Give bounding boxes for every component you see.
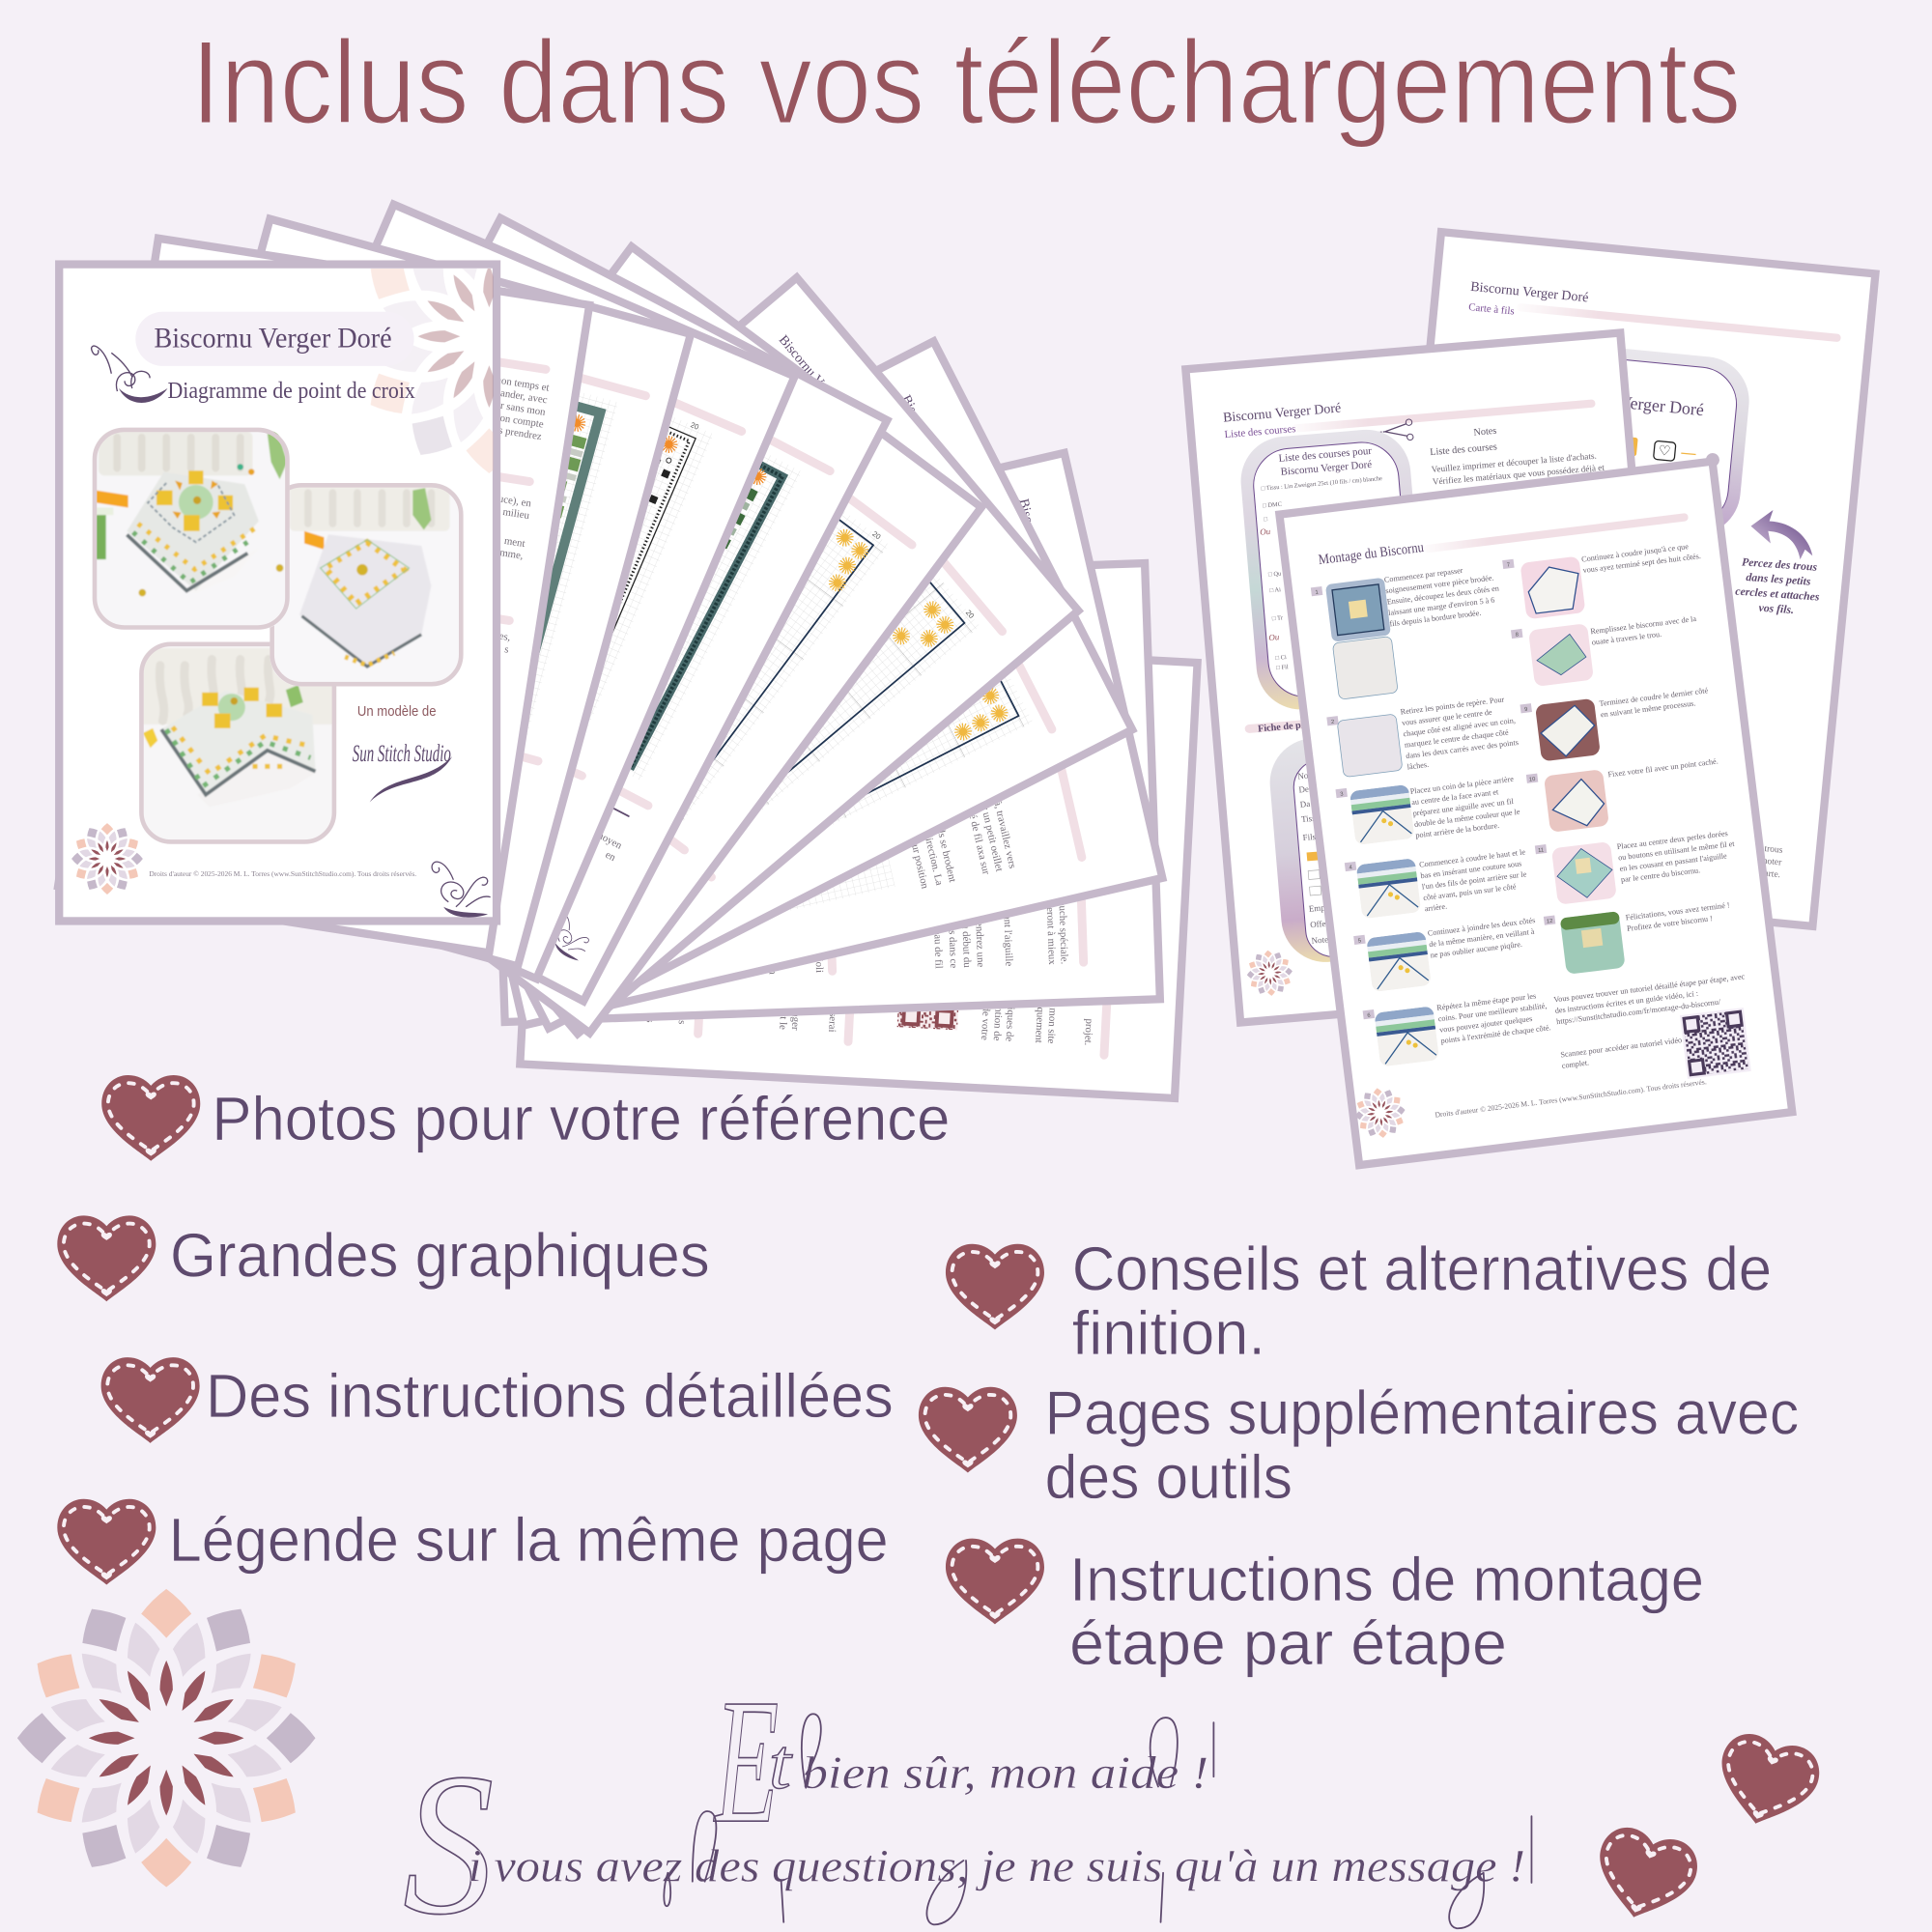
shopping list card: Ou — [1268, 632, 1280, 642]
script line 1: E — [713, 1662, 779, 1861]
shopping list card: □ Fil — [1276, 664, 1289, 671]
panel: page 6 chart — [297, 277, 1078, 1034]
shopping list card: □ Tr — [1272, 614, 1284, 622]
panel: page 8 text and chart — [426, 453, 1162, 1025]
panel: page 9 text: (pas dans ce — [946, 917, 959, 969]
panel: page 9 text: en joli — [812, 946, 825, 973]
step 9: en suivant le même processus. — [1600, 698, 1696, 719]
photo: biscornu underside — [270, 483, 464, 686]
script line 1: t — [769, 1725, 794, 1804]
QR code — [1680, 1008, 1751, 1079]
list item: extra pages: Pages supplémentaires avec — [1045, 1378, 1799, 1448]
list item: instructions — [101, 1357, 894, 1443]
step 9: 9 — [1524, 707, 1528, 713]
thread card: Biscornu Verger Doré — [1553, 385, 1705, 419]
panel: page 10 with QR code: utils — [614, 1003, 627, 1021]
list item: finishing tips: Conseils et alternatives de — [1072, 1234, 1772, 1303]
step 11 — [1535, 821, 1740, 907]
panel: page 9 text: viendrez une — [973, 913, 986, 968]
icon: heart right bottom — [1586, 1822, 1703, 1930]
step 4 — [1345, 840, 1531, 923]
page logo — [1245, 949, 1294, 998]
panel: page 9 text: aideront à mieux — [1043, 895, 1058, 965]
step 6: coins. Pour une meilleure stabilité, — [1437, 1002, 1548, 1023]
list item: extra pages — [919, 1378, 1799, 1512]
tutorial text: https://Sunstitchstudio.com/fr/montage-du-biscornu/ — [1556, 997, 1721, 1026]
notes text: Vérifiez les matériaux que vous possédez déjà et — [1432, 463, 1605, 487]
scan text: Scannez pour accéder au tutoriel vidéo — [1560, 1036, 1683, 1059]
step 3 — [1335, 767, 1522, 849]
step 8: ouate à travers le trou. — [1591, 630, 1662, 647]
step 2: Retirez les points de repère. Pour — [1400, 695, 1505, 717]
arrow — [1750, 510, 1812, 559]
list item: charts — [57, 1215, 710, 1301]
panel: page 10 with QR code: de sur mon site — [1045, 980, 1060, 1044]
panel: page 3 chart with black symbols: 20 — [689, 420, 700, 432]
step 12: Profitez de votre biscornu ! — [1627, 914, 1713, 933]
panel: page 2 chart with green block — [97, 219, 691, 966]
step 8: Remplissez le biscornu avec de la — [1590, 614, 1697, 636]
project sheet card: Fils : — [1302, 832, 1321, 842]
page title: Montage du Biscornu — [1318, 540, 1425, 568]
step 5: Continuez à joindre les deux côtés — [1427, 916, 1536, 938]
step 10 — [1526, 752, 1724, 835]
list item: photos — [101, 1075, 950, 1161]
step 12: 12 — [1547, 919, 1553, 925]
panel: page 5 chart: 20 — [870, 529, 882, 541]
panel: page 8 text and chart: Biscornu Verger Doré — [1015, 497, 1058, 616]
panel: page 6 chart: 20 — [964, 609, 976, 620]
step 3: Placez un coin de la pièce arrière — [1409, 775, 1515, 796]
step 3: au centre de la face avant et — [1411, 787, 1499, 807]
signature — [353, 739, 452, 802]
step 1: Ensuite, découpez les deux côtés en — [1386, 583, 1499, 607]
thread card: ♡ — [1658, 442, 1671, 459]
project sheet card: De — [1298, 784, 1309, 794]
credit label: Un modèle de — [357, 704, 437, 720]
step 11: 11 — [1538, 847, 1545, 854]
step 6: points à l'extrémité de chaque côté. — [1440, 1023, 1551, 1045]
note: pierce the holes: vos fils. — [1758, 602, 1794, 616]
panel: page 8 text and chart: leur position — [907, 836, 931, 891]
list item: legend: Légende sur la même page — [169, 1505, 889, 1575]
step 2: marquez le centre de chaque côté — [1404, 728, 1510, 750]
panel: page 1 text: mander, avec — [492, 386, 549, 406]
shopping list card — [1237, 426, 1430, 713]
notes text — [1429, 417, 1605, 487]
cover logo — [71, 823, 143, 895]
cover title: Biscornu Verger Doré — [154, 324, 392, 355]
step 11: ou boutons en utilisant le même fil et — [1618, 839, 1736, 862]
step 4: 4 — [1349, 865, 1353, 871]
note: pierce the holes: dans les petits — [1746, 571, 1811, 588]
project sheet card: Tissu — [1301, 812, 1321, 824]
signature: Sun Stitch Studio — [353, 739, 451, 767]
notes text: Liste des courses — [1430, 441, 1497, 458]
panel: page 1 text: us prendrez — [493, 424, 543, 442]
section label: Carte à fils — [1468, 301, 1515, 318]
fan of pattern pages — [58, 205, 1198, 1098]
step 4: côté avant, puis un sur le côté — [1423, 882, 1517, 902]
thread card — [1503, 339, 1753, 539]
ornament: page curl — [1720, 875, 1758, 912]
step 7 — [1502, 536, 1706, 621]
panel: page 10 with QR code: projet. — [1082, 1018, 1094, 1046]
decorative mandala on cover — [371, 269, 493, 473]
step 3: 3 — [1340, 791, 1344, 798]
panel: page 4 chart with green border — [197, 218, 887, 1001]
step 1: fils depuis la bordure brodée. — [1389, 609, 1482, 628]
shopping list card: Liste des courses pour — [1278, 445, 1373, 465]
panel: page 4 chart with green border: en — [604, 849, 618, 864]
step 12 — [1544, 894, 1736, 977]
project sheet card: Emplac — [1308, 901, 1335, 914]
panel: page 9 text: au début du — [959, 919, 973, 968]
icon: heart right top — [1708, 1728, 1826, 1836]
step 4: Commencez à coudre le haut et le — [1419, 847, 1526, 869]
panel: page 1 text: mme, — [498, 547, 525, 562]
script line 1 — [713, 1662, 1213, 1861]
panel: page 1 text: tion compte — [494, 412, 545, 431]
ornament: corner curl — [432, 862, 491, 918]
copyright: Droits d'auteur © 2025-2026 M. L. Torres (www.SunStitchStudio.com). Tous droits réservés. — [149, 869, 416, 878]
shopping list card: □ Ai — [1269, 586, 1281, 594]
step 2: lâches. — [1406, 760, 1430, 772]
panel: thread card page — [1378, 232, 1875, 926]
step 8 — [1511, 608, 1702, 689]
step 1: Commencez par repasser — [1383, 566, 1463, 584]
shopping list card: □ Ci — [1275, 654, 1287, 662]
shopping list card: □ Tissu : Lin Zweigart 25ct (10 fils / cm) blanche — [1261, 475, 1382, 493]
panel: thread card page: veuillez noter — [1731, 853, 1783, 868]
notes text: Notes — [1473, 426, 1497, 439]
notes text: Veuillez imprimer et découper la liste d'achats. — [1431, 451, 1597, 474]
script line 2 — [403, 1731, 1531, 1932]
photo: biscornu back view — [139, 642, 336, 844]
project sheet card: Notes — [1311, 934, 1332, 946]
step 9: Terminez de coudre le dernier côté — [1599, 686, 1709, 708]
step 5: ne pas oublier aucune piqûre. — [1430, 940, 1522, 959]
panel: page 10 with QR code: pratiques de — [1004, 990, 1017, 1042]
panel: page 7 chart — [350, 341, 1132, 1028]
panel: page 3 chart with black symbols — [135, 205, 795, 979]
page logo — [1352, 1085, 1408, 1141]
cover subtitle: Diagramme de point de croix — [167, 378, 415, 404]
icon: scissors — [1343, 419, 1413, 445]
section label: Liste des courses — [1224, 423, 1296, 440]
cover title pill — [135, 312, 414, 366]
shopping list card: □ — [1264, 516, 1268, 523]
list item: finishing tips — [946, 1234, 1772, 1368]
panel: page 8 text and chart: de là, travaillez vers — [988, 785, 1018, 869]
step 8: 8 — [1515, 632, 1519, 639]
note: pierce the holes: Percez des trous — [1742, 555, 1818, 574]
step 2: dans les deux carrés avec des points — [1406, 738, 1519, 760]
panel: page 1 text — [58, 239, 589, 952]
title: Inclus dans vos téléchargements — [191, 16, 1741, 149]
panel: page 10 with QR code: c'est le — [777, 1001, 790, 1030]
panel: page 5 chart — [240, 246, 981, 1033]
list item: charts: Grandes graphiques — [170, 1220, 710, 1290]
step 6: vous pouvez ajouter quelques — [1439, 1014, 1533, 1035]
step 7: vous ayez terminé sept des huit côtés. — [1582, 552, 1701, 575]
step 3: point arrière de la bordure. — [1415, 821, 1500, 839]
step 6 — [1363, 988, 1553, 1068]
shopping list card: □ Qu — [1268, 570, 1282, 579]
panel: page 10 with QR code: de uniquement — [1033, 980, 1047, 1043]
panel: page 1 text: uce), en — [497, 493, 532, 510]
step 1: 1 — [1315, 589, 1319, 596]
project sheet card: Notes — [1297, 770, 1319, 781]
copyright: Droits d'auteur © 2025-2026 M. L. Torres (www.SunStitchStudio.com). Tous droits réservés. — [1435, 1077, 1707, 1120]
tutorial text: des instructions écrites et un guide vidéo, ici : — [1554, 989, 1699, 1015]
panel: page 8 text and chart: ue direction. La — [919, 819, 945, 887]
panel: page 6 chart: Biscornu Verger Doré — [776, 332, 864, 433]
panel: page 1 text: es, — [498, 630, 512, 643]
list item: photos: Photos pour votre référence — [212, 1084, 950, 1153]
step 1: soigneusement votre pièce brodée. — [1385, 574, 1494, 595]
list item: assembly: Instructions de montage — [1069, 1545, 1704, 1614]
panel: page 9 text: reau de fil — [931, 926, 945, 969]
step 2: vous assurer que le centre de — [1402, 708, 1492, 727]
step 2: chaque côté est aligné avec un coin, — [1403, 716, 1516, 738]
ornament: swirl — [92, 346, 167, 403]
step 1: laissant une marge d'environ 5 à 6 — [1388, 596, 1495, 617]
panel: page 8 text and chart: trer un petit oeillet — [977, 794, 1005, 872]
page note: faire des trous — [1730, 840, 1783, 856]
step 4: l'un des fils de point arrière sur le — [1421, 869, 1527, 892]
panel: page 7 chart: Biscornu Verger Doré — [898, 392, 966, 505]
page title: Biscornu Verger Doré — [1470, 279, 1589, 305]
tutorial text: Vous pouvez trouver un tutoriel détaillé étape par étape, avec — [1553, 972, 1746, 1004]
panel: page 10 with QR code: Je serai — [826, 1001, 839, 1033]
script line 2: i vous avez des questions, je ne suis qu'à un message ! — [469, 1842, 1525, 1892]
panel: page 8 text and chart: carré de fil axa sur — [963, 797, 992, 876]
step 10: 10 — [1529, 777, 1536, 783]
scan text: complet. — [1561, 1058, 1589, 1070]
panel: page 10 with QR code: photo de votre — [979, 980, 993, 1040]
panel: cover page — [59, 199, 626, 921]
step 7: 7 — [1507, 562, 1511, 569]
list item: instructions: Des instructions détaillées — [206, 1361, 894, 1431]
step 6: Répétez la même étape pour les — [1436, 991, 1537, 1012]
list item: assembly — [946, 1539, 1704, 1678]
note: pierce the holes — [1734, 555, 1822, 618]
panel: page 1 text: s — [503, 643, 509, 656]
panel: assembly instructions page — [1279, 462, 1792, 1165]
page title: Biscornu Verger Doré — [1222, 400, 1342, 426]
photo: biscornu front view — [93, 428, 290, 630]
panel: page 4 chart with green border: moyen — [593, 828, 624, 852]
step 4: bas en insérant une couture sous — [1420, 859, 1522, 880]
panel: page 1 text: ner sans mon — [490, 398, 547, 418]
step 12: Félicitations, vous avez terminé ! — [1625, 900, 1730, 923]
project sheet card: Offert — [1310, 918, 1332, 929]
logo mandala — [17, 1589, 316, 1888]
panel: shopping list page — [1185, 333, 1675, 1023]
step 4: arrière. — [1424, 902, 1447, 913]
panel: page 9 text: de touche spéciale. — [1056, 885, 1070, 964]
note: pierce the holes: cercles et attaches — [1735, 585, 1820, 604]
step 7: Continuez à coudre jusqu'à ce que — [1581, 542, 1690, 564]
step 10: Fixez votre fil avec un point caché. — [1607, 756, 1719, 779]
step 3: préparez une aiguille avec un fil — [1412, 797, 1515, 818]
panel: page 10 with QR code: dans — [676, 1005, 689, 1025]
step 2: 2 — [1331, 720, 1335, 725]
step 11: Placez au centre deux perles dorées — [1616, 829, 1728, 851]
step 11: en les cousant en passant l'aiguille — [1619, 851, 1727, 873]
panel: page 9 text: un — [766, 964, 779, 976]
panel: page 1 text: ment — [503, 535, 526, 550]
step 2 — [1326, 694, 1520, 781]
shopping list card: □ DMC — [1263, 501, 1282, 509]
step 3: double de la même couleur que le — [1414, 808, 1520, 829]
panel: page 8 text and chart: et. Ils se brodent — [931, 813, 958, 883]
shopping list card: Ou — [1260, 526, 1271, 537]
project sheet card: Da — [1299, 799, 1311, 810]
panel: page 10 with QR code: attention de — [991, 991, 1005, 1041]
shopping list card: Biscornu Verger Doré — [1280, 459, 1373, 478]
panel: page 9 text: mant l'aiguille — [1001, 906, 1014, 967]
script line 1: bien sûr, mon aide ! — [802, 1748, 1208, 1799]
panel: thread card page: ns la carte. — [1741, 866, 1781, 880]
step 5 — [1353, 914, 1542, 994]
list item: extra pages: des outils — [1045, 1442, 1293, 1512]
panel: page 10 with QR code: pos — [644, 1008, 656, 1023]
section label: sheet — [1249, 716, 1360, 735]
list item: legend — [57, 1499, 889, 1585]
section label: sheet: Fiche de projet — [1258, 719, 1321, 734]
panel: page 10 with QR code — [520, 629, 1198, 1098]
project sheet card — [1266, 728, 1445, 966]
panel: page 1 text: milieu — [502, 506, 530, 522]
panel: page 10 with QR code: partager — [789, 996, 803, 1031]
step 9 — [1520, 682, 1715, 763]
list item: finishing tips: finition. — [1072, 1298, 1265, 1368]
list item: assembly: étape par étape — [1069, 1608, 1507, 1678]
step 11: par le centre du biscornu. — [1620, 866, 1701, 884]
step 6: 6 — [1367, 1012, 1371, 1019]
panel: page 9 text — [490, 563, 1160, 1022]
step 5: de la même manière, en veillant à — [1429, 927, 1535, 949]
panel: page 1 text: mon temps et — [493, 374, 550, 394]
step 5: 5 — [1358, 938, 1362, 945]
step 1 — [1310, 562, 1510, 701]
